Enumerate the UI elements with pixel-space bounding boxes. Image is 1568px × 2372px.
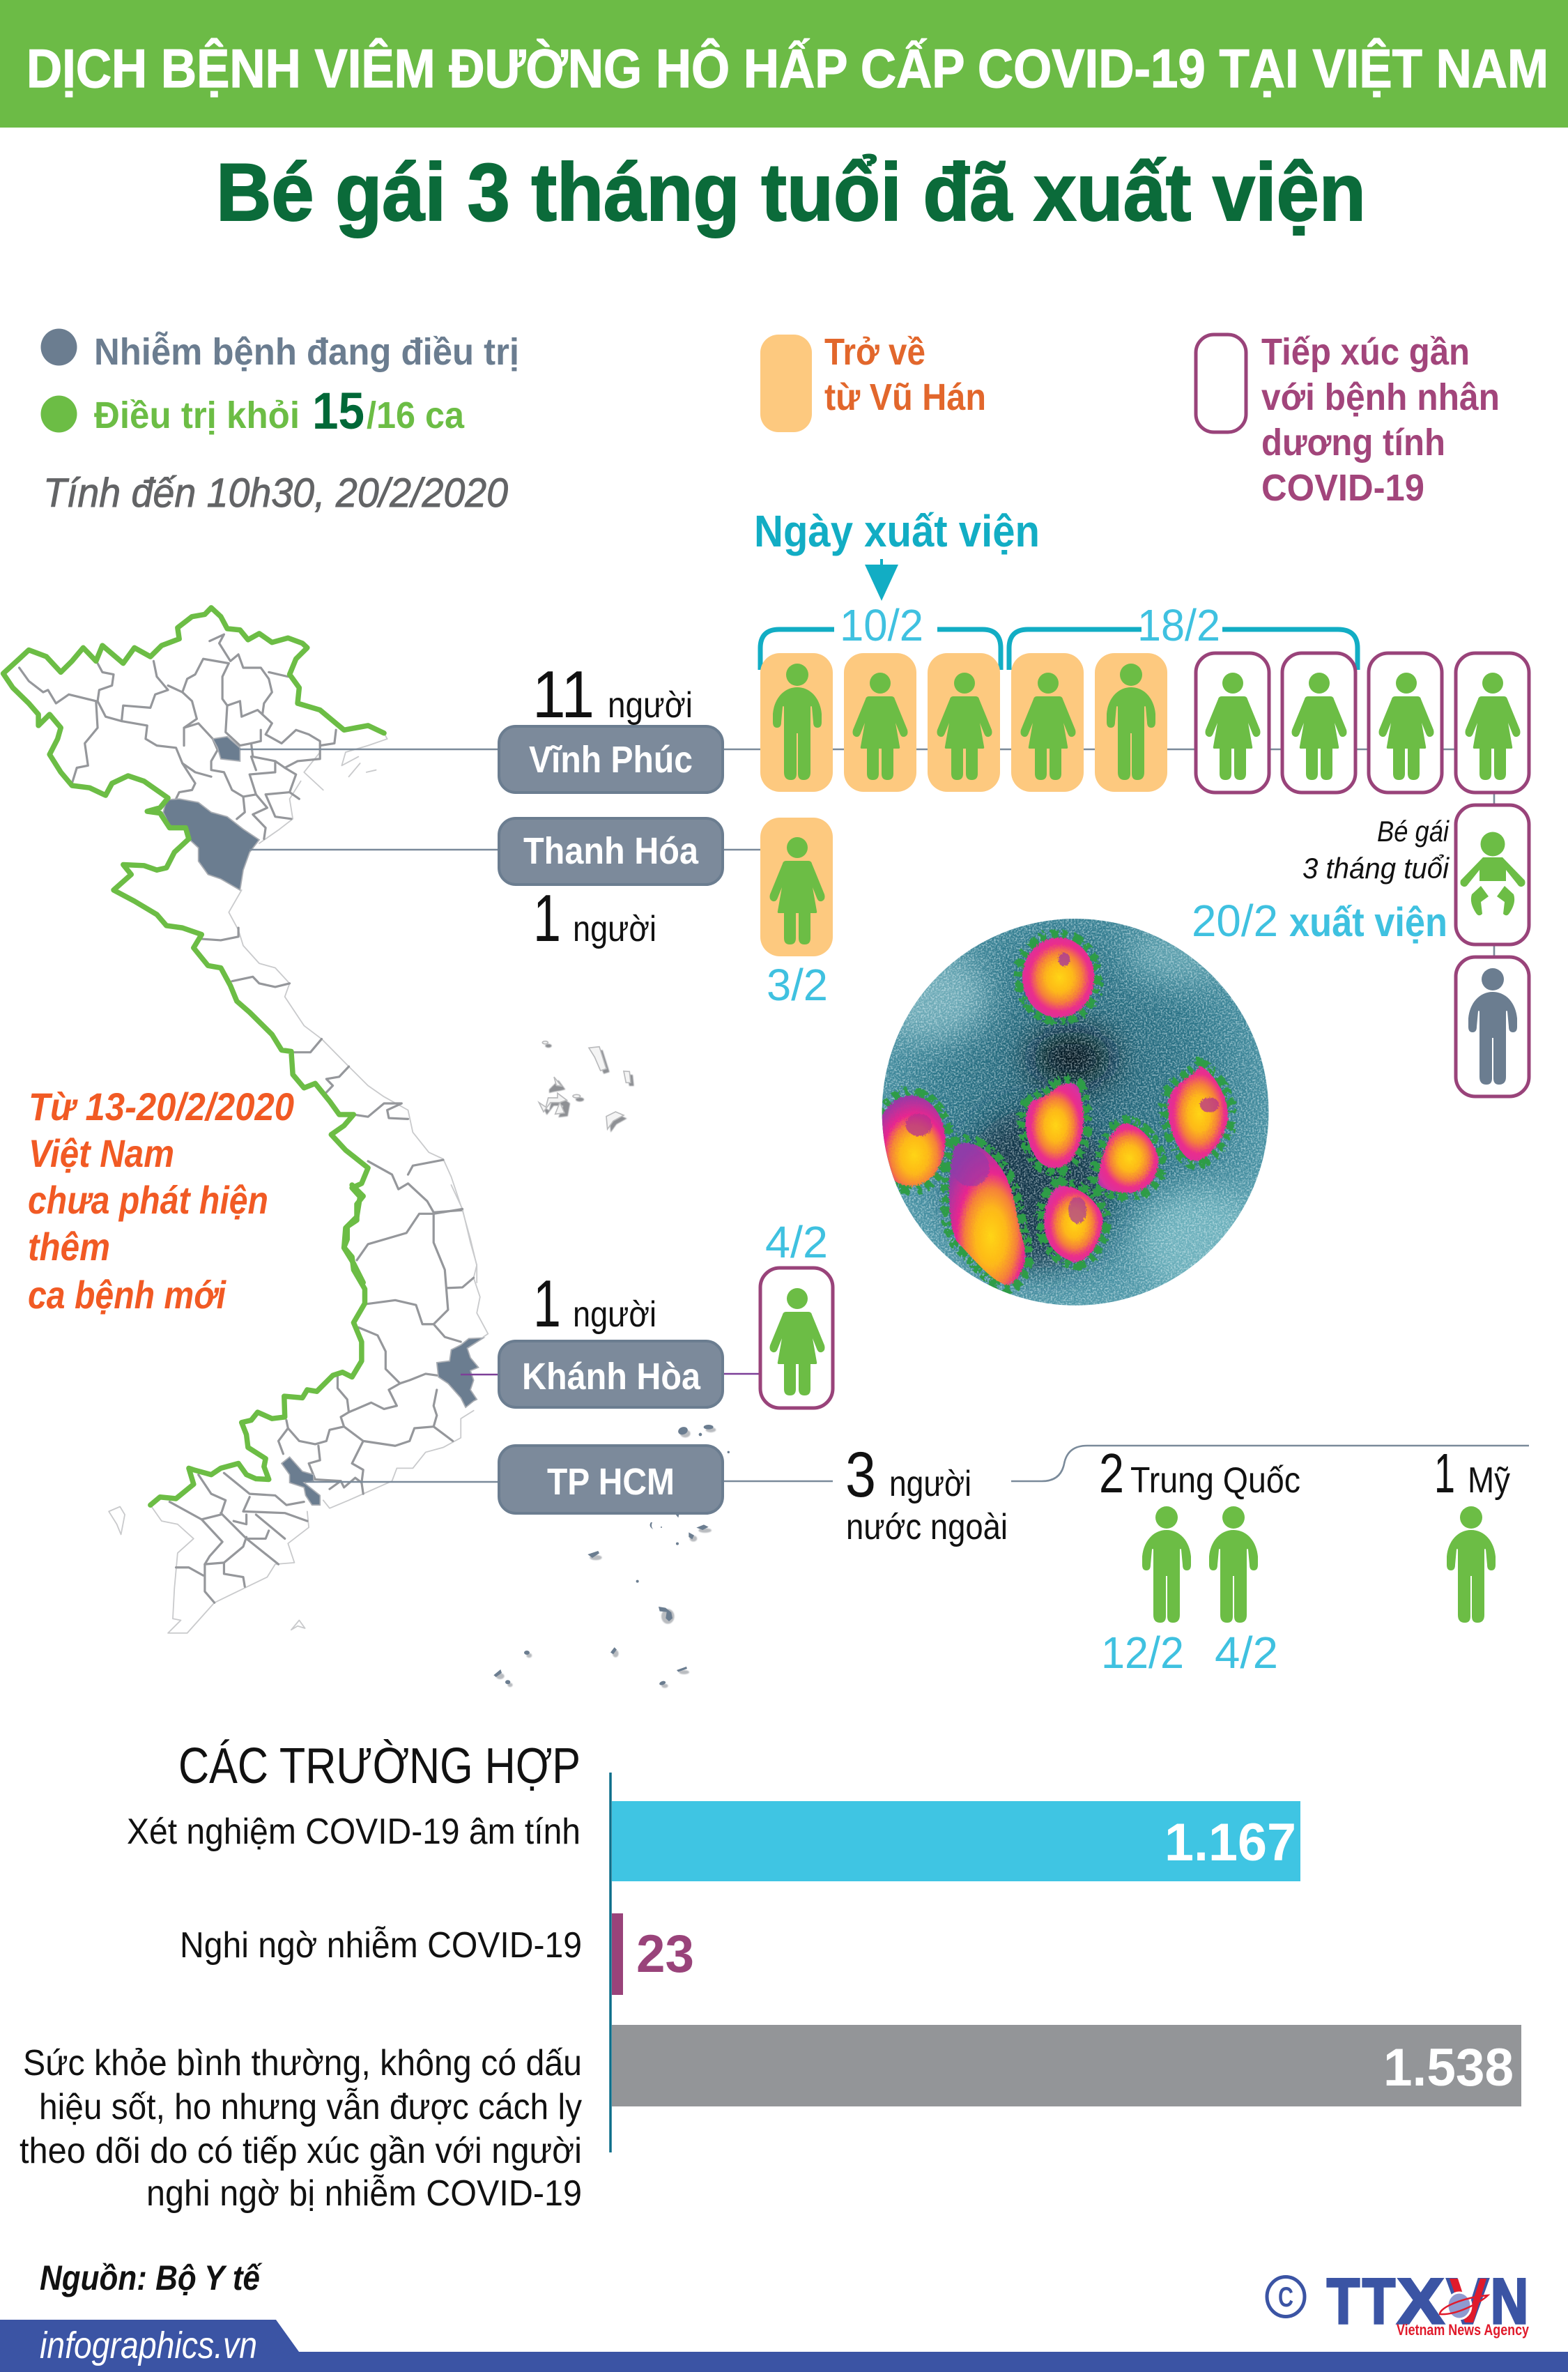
icon: person under treatment	[1456, 957, 1529, 1096]
legend: close contact	[1196, 331, 1500, 509]
label: being treated: Nhiễm bệnh đang điều trị	[94, 331, 519, 373]
coronavirus micrograph	[882, 919, 1268, 1306]
patient: Khanh Hoa	[760, 1268, 833, 1408]
bracket 10/2	[760, 629, 1001, 670]
icons: foreign patients	[1142, 1506, 1496, 1623]
connector: baby to adult chain	[1493, 793, 1495, 957]
callout: no new cases: ca bệnh mới	[28, 1273, 226, 1317]
bar: negative tests	[612, 1801, 1300, 1881]
total count: /16 ca	[367, 395, 465, 436]
row label: isolated: nghi ngờ bị nhiễm COVID-19	[146, 2173, 582, 2214]
red V	[1450, 2279, 1486, 2323]
callout: no new cases: Việt Nam	[29, 1131, 174, 1175]
value 1.538: 1.538	[1383, 2038, 1514, 2097]
date 4/2: 4/2	[765, 1217, 828, 1267]
China count	[1099, 1442, 1300, 1504]
islands: Truong Sa	[493, 1425, 730, 1688]
callout: no new cases	[28, 1085, 294, 1317]
bracket 18/2	[1009, 629, 1358, 670]
agency logo: C	[1278, 2282, 1293, 2313]
row label: isolated	[20, 2043, 582, 2214]
header banner	[0, 0, 1568, 128]
pill: TP HCM	[499, 1446, 723, 1513]
HCM foreigners count	[845, 1439, 1008, 1547]
Thanh Hoa count: 1	[533, 881, 561, 956]
patient row: Vinh Phuc, returned from Wuhan	[760, 653, 1167, 792]
date 12/2: 12/2	[1101, 1628, 1184, 1678]
row label: isolated: hiệu sốt, ho nhưng vẫn được cách ly	[39, 2087, 582, 2127]
date 10/2: 10/2	[840, 600, 923, 650]
connector: Thanh Hoa row	[249, 849, 760, 850]
TTXVN letters	[1327, 2266, 1528, 2337]
Vinh Phuc count: 11	[532, 657, 594, 732]
date 4/2 foreign: 4/2	[1215, 1628, 1278, 1678]
pill: Vinh Phuc: Vĩnh Phúc	[529, 739, 693, 781]
legend: returned from Wuhan	[760, 331, 986, 432]
Vinh Phuc count	[532, 657, 693, 732]
baby discharge date	[1192, 896, 1447, 946]
row label: isolated: theo dõi do có tiếp xúc gần với người	[20, 2131, 582, 2171]
map of Vietnam: south	[109, 1185, 488, 1633]
pill: TP HCM: TP HCM	[547, 1461, 675, 1503]
swatch label: Trở về	[824, 331, 925, 373]
recovered count: 15	[312, 382, 364, 440]
connector: Vinh Phuc row	[240, 749, 1463, 750]
copyright mark	[1267, 2277, 1305, 2317]
axis	[609, 1773, 612, 2152]
baby label: 3 tháng tuổi	[1302, 852, 1450, 885]
globe	[1447, 2293, 1471, 2319]
legend: status	[40, 329, 519, 440]
TTXVN letters: T	[1327, 2266, 1360, 2337]
TTXVN letters: X	[1397, 2266, 1444, 2337]
bar: isolated	[612, 2025, 1521, 2106]
swatch label: Tiếp xúc gần	[1261, 331, 1470, 373]
pill: Thanh Hoa	[499, 818, 723, 885]
main heading: Bé gái 3 tháng tuổi đã xuất viện	[216, 146, 1366, 238]
callout: no new cases: thêm	[28, 1225, 110, 1269]
value 23: 23	[636, 1925, 694, 1984]
TTXVN letters: N	[1491, 2266, 1528, 2337]
cases section heading: CÁC TRƯỜNG HỢP	[178, 1738, 581, 1794]
pill: Vinh Phuc	[499, 726, 723, 793]
TTXVN letters: V	[1447, 2266, 1489, 2337]
USA count: 1	[1434, 1442, 1455, 1504]
Thanh Hoa count: người	[573, 909, 656, 949]
date 3/2: 3/2	[767, 960, 828, 1010]
gray dot	[40, 329, 77, 365]
map of Vietnam: north and centre	[3, 608, 477, 1283]
label: recovered: Điều trị khỏi	[94, 395, 300, 436]
orbit	[1440, 2295, 1488, 2314]
callout: no new cases: chưa phát hiện	[28, 1178, 268, 1222]
patient: Thanh Hoa	[760, 818, 833, 956]
purple swatch	[1196, 335, 1246, 432]
callout: no new cases: Từ 13-20/2/2020	[29, 1085, 294, 1128]
Thanh Hoa count	[533, 881, 656, 956]
China count: Trung Quốc	[1130, 1460, 1300, 1501]
footer site: infographics.vn	[40, 2325, 257, 2366]
USA count: Mỹ	[1468, 1460, 1510, 1501]
icon: baby	[1456, 805, 1529, 944]
Khanh Hoa count: người	[573, 1294, 656, 1335]
row label: negative tests: Xét nghiệm COVID-19 âm tính	[127, 1812, 581, 1852]
connector: Khanh Hoa row	[461, 1374, 760, 1375]
bar: suspected	[612, 1913, 623, 1995]
USA count	[1434, 1442, 1510, 1504]
swatch label: dương tính	[1261, 422, 1445, 464]
pill: Thanh Hoa: Thanh Hóa	[523, 830, 699, 872]
baby discharge date: xuất viện	[1289, 900, 1447, 945]
agency name: Vietnam News Agency	[1397, 2321, 1530, 2339]
China count: 2	[1099, 1442, 1124, 1504]
HCM foreigners count: nước ngoài	[846, 1507, 1008, 1547]
bar chart	[610, 1773, 1521, 2152]
TTXVN letters: T	[1362, 2266, 1395, 2337]
baby label	[1302, 815, 1450, 885]
discharge date heading: Ngày xuất viện	[754, 506, 1040, 556]
agency logo	[1267, 2266, 1530, 2339]
orange swatch	[760, 335, 812, 432]
pill: Khanh Hoa	[499, 1341, 723, 1407]
source: Nguồn: Bộ Y tế	[40, 2258, 263, 2297]
swatch label: từ Vũ Hán	[824, 376, 986, 418]
pill: Khanh Hoa: Khánh Hòa	[522, 1356, 701, 1398]
arrow	[865, 559, 898, 601]
HCM foreigners count: 3	[845, 1439, 876, 1510]
islands: Hoang Sa	[539, 1041, 634, 1133]
row label: isolated: Sức khỏe bình thường, không có dấu	[23, 2043, 582, 2083]
Khanh Hoa count: 1	[533, 1267, 561, 1341]
timestamp: Tính đến 10h30, 20/2/2020	[43, 470, 508, 516]
HCM foreigners count: người	[889, 1464, 971, 1504]
connector: foreigners bracket	[1011, 1446, 1529, 1481]
row label: suspected: Nghi ngờ nhiễm COVID-19	[180, 1925, 582, 1966]
swatch label: với bệnh nhân	[1261, 376, 1500, 418]
swatch label: COVID-19	[1261, 467, 1424, 509]
footer bar	[0, 2320, 1568, 2372]
patient row: Vinh Phuc, close contacts	[1196, 653, 1529, 793]
Vinh Phuc count: người	[608, 685, 693, 726]
green dot	[40, 396, 77, 432]
value 1.167: 1.167	[1165, 1813, 1296, 1872]
baby discharge date: 20/2	[1192, 896, 1278, 946]
connector: HCM row	[305, 1481, 833, 1482]
Khanh Hoa count	[533, 1267, 656, 1341]
baby label: Bé gái	[1377, 815, 1450, 848]
date 18/2: 18/2	[1137, 600, 1220, 650]
